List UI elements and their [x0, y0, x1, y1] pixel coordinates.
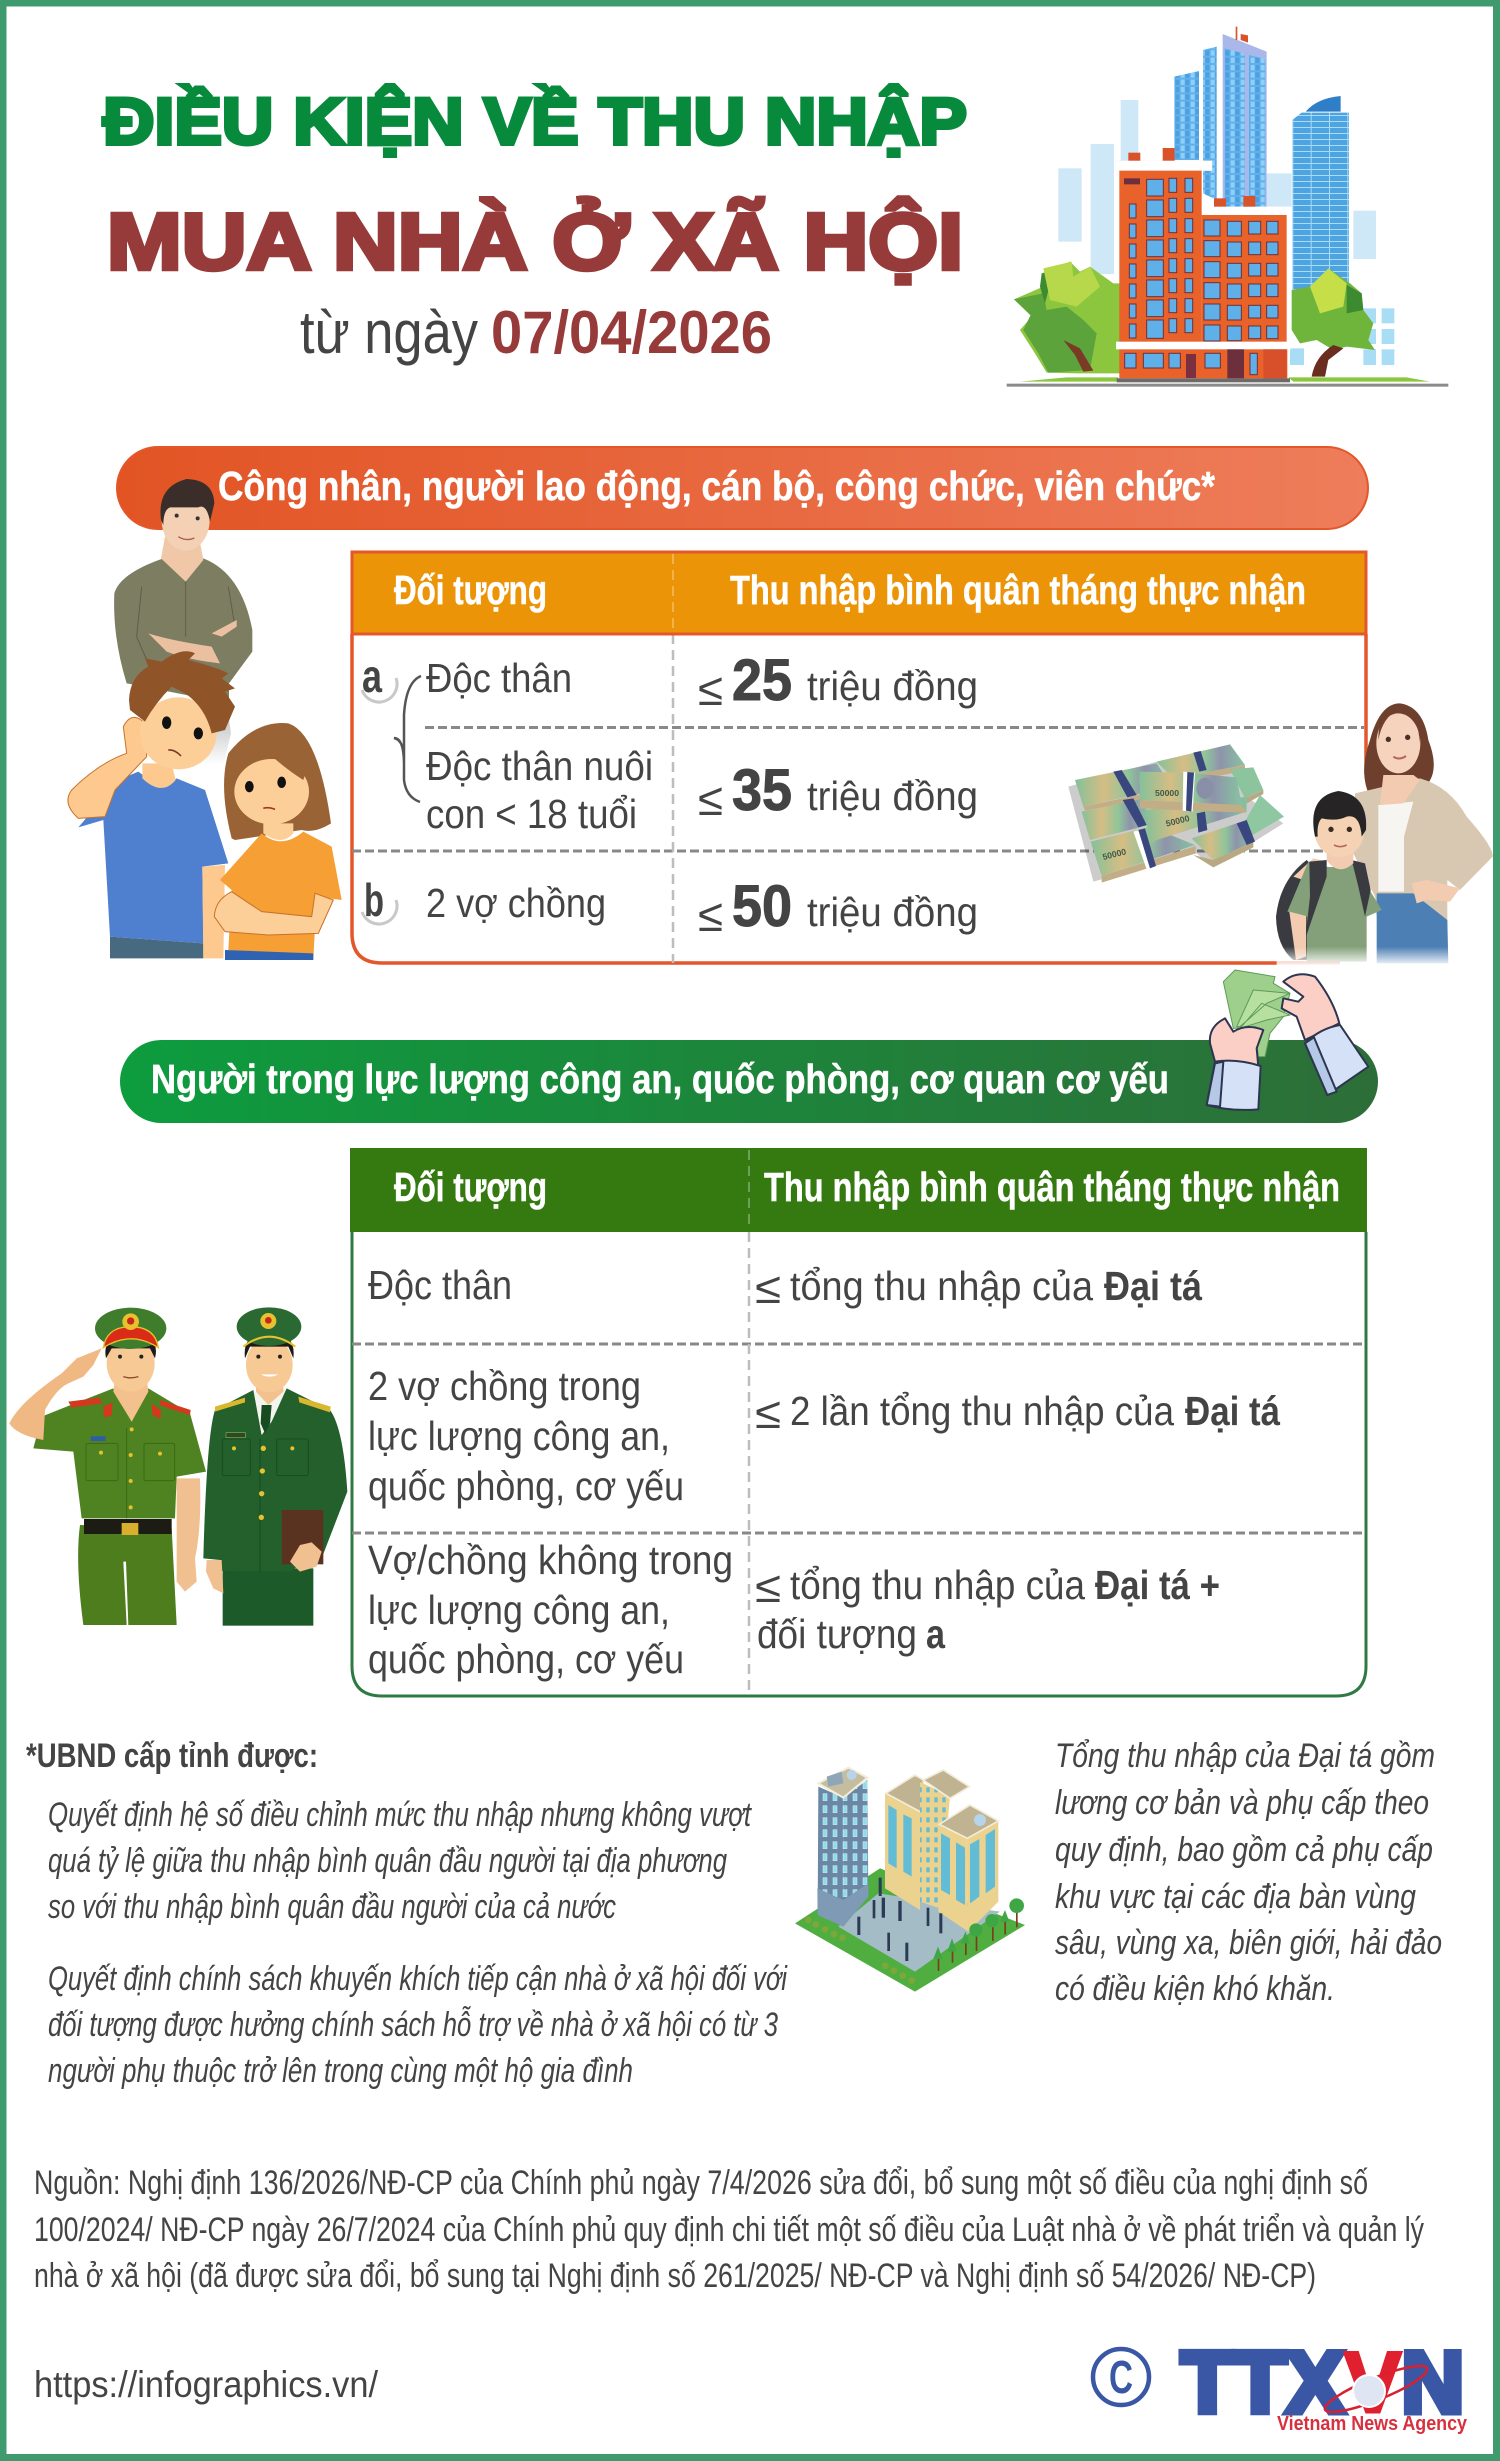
icon: copyright: [1093, 2349, 1149, 2405]
row labels: Độc thân: [426, 655, 572, 701]
logo: copyright and TTXVN: [1093, 2335, 1468, 2435]
man: [114, 479, 252, 765]
icon: money bundles: 50000: [1101, 846, 1127, 862]
row labels: 2 vợ chồng: [426, 880, 606, 926]
icon: money bundles: [1068, 744, 1284, 883]
row: single: Độc thân: [368, 1262, 512, 1308]
icon: isometric apartment complex: [795, 1768, 1025, 1992]
row: couple in forces: [368, 1363, 1280, 1509]
row: spouse outside forces: Vợ/chồng không trong: [368, 1537, 733, 1583]
table header: [350, 1148, 1367, 1232]
value 25: 25: [732, 648, 792, 713]
row labels: con < 18 tuổi: [426, 791, 637, 837]
table header: [352, 552, 1366, 634]
ground: [1020, 377, 1430, 382]
notes heading: *UBND cấp tỉnh được:: [26, 1737, 318, 1775]
pill heading text: Công nhân, người lao động, cán bộ, công chức, viên chức*: [218, 463, 1215, 509]
icon: money bundles: 50000: [1165, 813, 1191, 829]
row: couple in forces: lực lượng công an,: [368, 1413, 670, 1459]
note 2: đối tượng được hưởng chính sách hỗ trợ về nhà ở xã hội có từ 3: [48, 2006, 778, 2044]
side note: total colonel income: Tổng thu nhập của Đại tá gồm: [1055, 1737, 1435, 1775]
row: single: [368, 1262, 1202, 1313]
row: couple in forces: 2 vợ chồng trong: [368, 1363, 641, 1409]
value 35: ≤: [698, 773, 723, 825]
row: spouse outside forces: ≤: [755, 1563, 781, 1612]
side note: total colonel income: có điều kiện khó khăn.: [1055, 1970, 1335, 2008]
panel: workers heading pill: [117, 447, 1368, 529]
row: spouse outside forces: quốc phòng, cơ yếu: [368, 1636, 684, 1682]
table header: Đối tượng: [394, 567, 547, 613]
marker b: b: [364, 874, 384, 926]
side note: total colonel income: quy định, bao gồm cả phụ cấp: [1055, 1831, 1433, 1869]
title date: 07/04/2026: [491, 299, 772, 366]
row: couple in forces: quốc phòng, cơ yếu: [368, 1463, 684, 1509]
panel: income table for security forces: [350, 1148, 1367, 1696]
icon: city buildings: [1007, 27, 1448, 387]
row: couple in forces: Đại tá: [1185, 1388, 1280, 1434]
table body outline: [352, 634, 1366, 963]
agency name: Vietnam News Agency: [1277, 2413, 1468, 2435]
red building: [1116, 161, 1212, 171]
note 2: [48, 1960, 788, 2090]
saluting officer: [9, 1308, 206, 1625]
title date: [300, 299, 772, 366]
side note: total colonel income: khu vực tại các địa bàn vùng: [1055, 1878, 1416, 1916]
row: couple in forces: 2 lần tổng thu nhập của: [790, 1388, 1174, 1434]
note 2: người phụ thuộc trở lên trong cùng một hộ gia đình: [48, 2052, 633, 2090]
row: spouse outside forces: Đại tá +: [1095, 1562, 1220, 1608]
value 25: [698, 648, 978, 715]
panel: income table for workers: [352, 552, 1366, 963]
row: spouse outside forces: tổng thu nhập của: [790, 1562, 1085, 1608]
marker a: a: [362, 650, 382, 702]
table body outline: [352, 1232, 1366, 1696]
icon: man, boy and girl: [68, 479, 342, 960]
title: [103, 84, 967, 366]
website url: https://infographics.vn/: [34, 2364, 379, 2405]
note 1: quá tỷ lệ giữa thu nhập bình quân đầu người tại địa phương: [48, 1842, 727, 1880]
icon: hands counting money: [1207, 970, 1368, 1110]
row: spouse outside forces: [368, 1537, 1220, 1682]
brace: [394, 676, 421, 802]
pill heading text: Người trong lực lượng công an, quốc phòng, cơ quan cơ yếu: [151, 1056, 1169, 1102]
side note: total colonel income: lương cơ bản và phụ cấp theo: [1055, 1784, 1429, 1822]
panel: security forces heading pill: [120, 1040, 1378, 1123]
notes: provincial people's committee: [26, 1737, 788, 2090]
row: spouse outside forces: a: [926, 1611, 946, 1657]
row: single: tổng thu nhập của: [790, 1263, 1093, 1309]
value 50: ≤: [698, 889, 723, 941]
value 25: triệu đồng: [807, 663, 978, 709]
right tree: [1292, 268, 1375, 350]
value 35: triệu đồng: [807, 773, 978, 819]
row: spouse outside forces: lực lượng công an,: [368, 1587, 670, 1633]
TTXVN wordmark: TTXVN: [1181, 2335, 1464, 2431]
note 1: Quyết định hệ số điều chỉnh mức thu nhập nhưng không vượt: [48, 1796, 752, 1834]
row labels: Độc thân nuôi: [426, 743, 653, 789]
table header: Đối tượng: [394, 1164, 547, 1210]
value 35: [698, 758, 978, 825]
title line 1: ĐIỀU KIỆN VỀ THU NHẬP: [103, 84, 967, 158]
officer with book: [203, 1307, 347, 1626]
girl in orange: [214, 723, 342, 960]
row: single: Đại tá: [1104, 1263, 1202, 1309]
row: single: ≤: [755, 1264, 781, 1313]
icon: copyright: C: [1109, 2351, 1133, 2403]
source note: [34, 2164, 1424, 2295]
icon: two soldiers: [9, 1307, 347, 1626]
icon: money bundles: 50000: [1155, 788, 1179, 798]
note 1: so với thu nhập bình quân đầu người của cả nước: [48, 1888, 616, 1926]
side note: total colonel income: [1055, 1737, 1442, 2008]
value 35: 35: [732, 758, 792, 823]
value 50: 50: [732, 874, 792, 939]
table header: Thu nhập bình quân tháng thực nhận: [730, 567, 1306, 613]
boy in blue: [68, 651, 235, 958]
value 50: triệu đồng: [807, 889, 978, 935]
title line 2: MUA NHÀ Ở XÃ HỘI: [107, 197, 963, 286]
row: couple in forces: ≤: [755, 1389, 781, 1438]
icon: mother and son: [1276, 703, 1493, 965]
title date: từ ngày: [300, 299, 478, 366]
value 50: [698, 874, 978, 941]
note 1: [48, 1796, 752, 1926]
row: spouse outside forces: đối tượng: [757, 1611, 917, 1657]
left tree: [1014, 262, 1120, 373]
icon: globe: [1321, 2358, 1431, 2420]
note 2: Quyết định chính sách khuyến khích tiếp cận nhà ở xã hội đối với: [48, 1960, 788, 1998]
table header: Thu nhập bình quân tháng thực nhận: [764, 1164, 1340, 1210]
row labels: [426, 655, 653, 926]
value 25: ≤: [698, 663, 723, 715]
